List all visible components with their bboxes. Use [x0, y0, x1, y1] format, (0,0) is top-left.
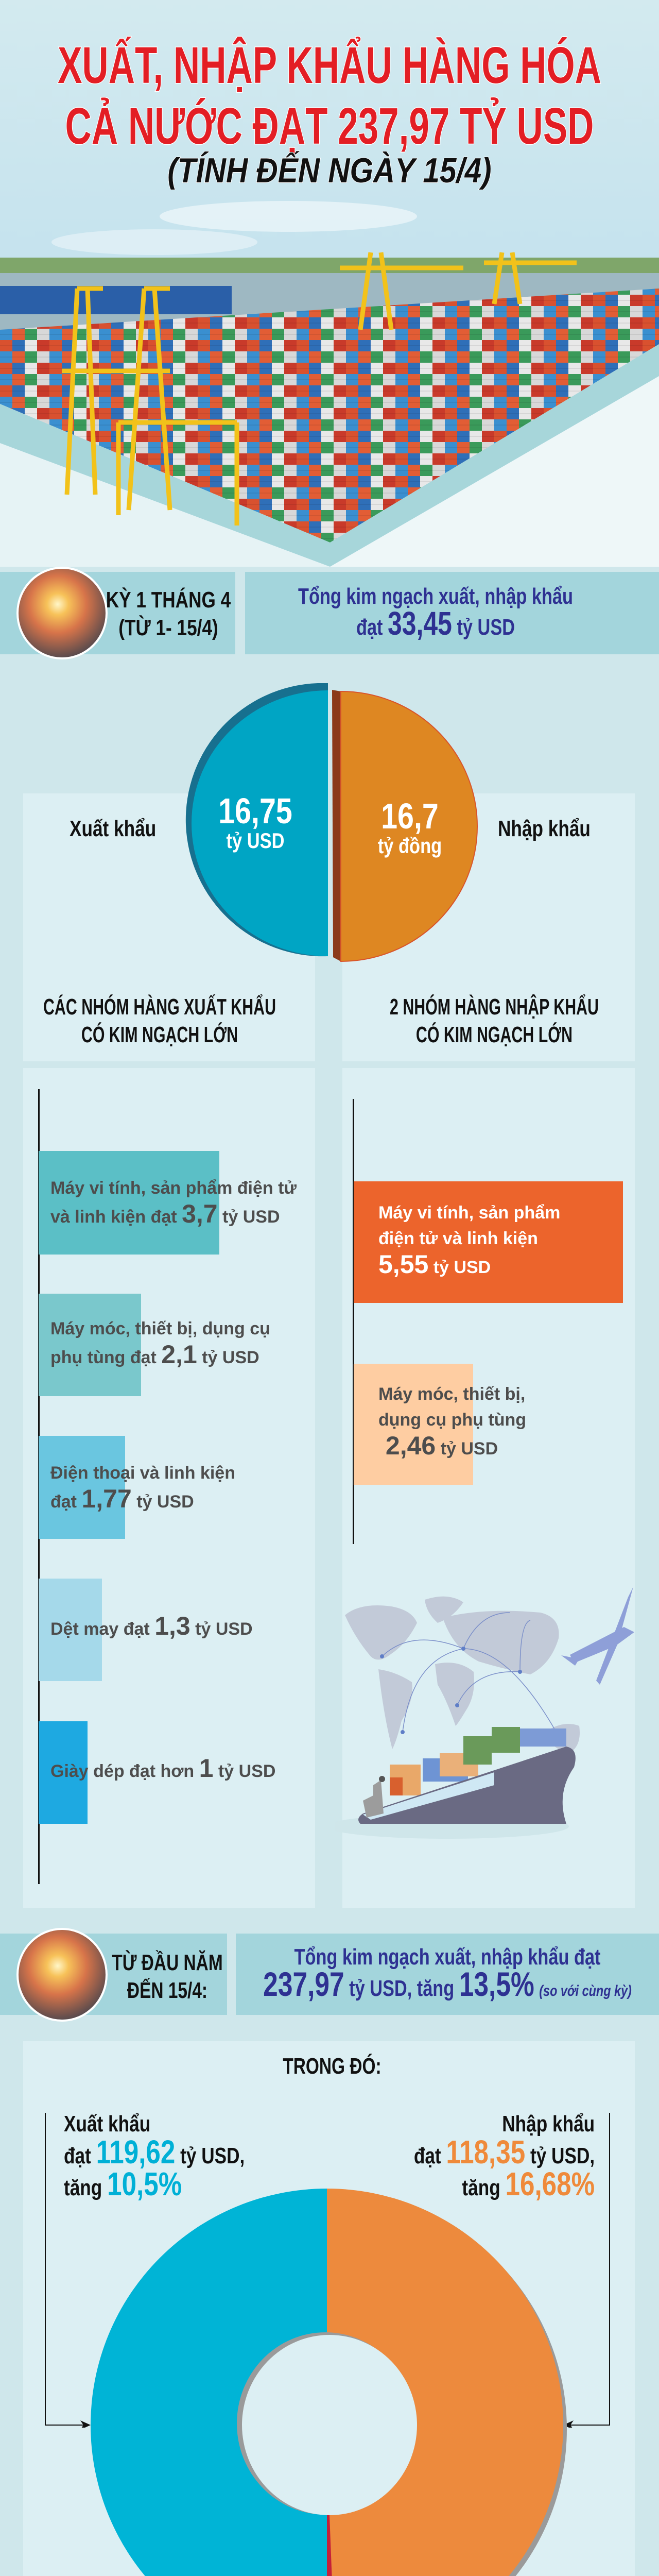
box: total: Tổng kim ngạch xuất, nhập khẩu đạt	[294, 1944, 600, 1970]
panel: export bar chart: Điện thoại và linh kiện	[50, 1463, 235, 1483]
box: period	[0, 1934, 227, 2015]
bar 3	[39, 1436, 125, 1539]
text: export year: đạt 119,62 tỷ USD,	[64, 2133, 245, 2171]
label: nhap khau: Nhập khẩu	[498, 816, 591, 841]
panel: export bar chart: đạt 1,77 tỷ USD	[50, 1484, 194, 1513]
panel: export bar chart: phụ tùng đạt 2,1 tỷ USD	[50, 1340, 259, 1369]
text: import year: đạt 118,35 tỷ USD,	[414, 2133, 595, 2171]
text: import year	[414, 2111, 595, 2202]
icon: port photo circle	[16, 567, 108, 659]
bracket arrows	[45, 2113, 610, 2428]
panel: import bar chart	[342, 1068, 635, 1908]
header band 1	[0, 567, 659, 659]
pie label: export value	[218, 791, 292, 853]
heading: import groups: CÓ KIM NGẠCH LỚN	[416, 1022, 573, 1047]
subtitle: (TÍNH ĐẾN NGÀY 15/4)	[167, 151, 492, 190]
heading: export groups	[43, 994, 276, 1047]
text: period	[112, 1950, 223, 2003]
text: period: KỲ 1 THÁNG 4	[106, 587, 231, 613]
label: xuat khau: Xuất khẩu	[70, 816, 156, 841]
panel: export bar chart: và linh kiện đạt 3,7 tỷ USD	[50, 1199, 280, 1228]
text: period: ĐẾN 15/4:	[127, 1978, 207, 2003]
box: total: đạt 33,45 tỷ USD	[356, 605, 515, 642]
heading: import groups	[390, 994, 599, 1047]
title: CẢ NƯỚC ĐẠT 237,97 TỶ USD	[65, 97, 594, 155]
box: total	[236, 1934, 659, 2015]
pie label: export value: 16,75	[218, 791, 292, 831]
text: import year: tăng 16,68%	[462, 2165, 595, 2202]
title: XUẤT, NHẬP KHẨU HÀNG HÓA	[58, 37, 601, 94]
panel: import bar chart: 2,46 tỷ USD	[386, 1431, 498, 1460]
axis	[353, 1099, 354, 1544]
heading: import groups: 2 NHÓM HÀNG NHẬP KHẨU	[390, 994, 599, 1020]
panel: right import lower	[342, 793, 635, 1061]
pie label: import value: tỷ đồng	[378, 834, 442, 858]
pie label: import value	[378, 796, 442, 858]
illustration: world map, ship and plane	[342, 1587, 634, 1839]
text: period: TỪ ĐẦU NĂM	[112, 1950, 223, 1975]
pie label: import value: 16,7	[381, 796, 439, 836]
donut chart	[91, 2189, 567, 2576]
panel: import bar chart: điện tử và linh kiện	[378, 1229, 538, 1248]
panel: left export lower	[23, 793, 315, 1061]
panel: import bar chart: dụng cụ phụ tùng	[378, 1410, 526, 1430]
heading: export groups: CÁC NHÓM HÀNG XUẤT KHẨU	[43, 994, 276, 1020]
heading: export groups: CÓ KIM NGẠCH LỚN	[81, 1022, 238, 1047]
text: export year: tăng 10,5%	[64, 2165, 182, 2202]
title	[57, 36, 601, 155]
panel: export bar chart: Giày dép đạt hơn 1 tỷ USD	[50, 1754, 275, 1783]
pie label: export value: tỷ USD	[227, 828, 284, 853]
panel: import bar chart: Máy vi tính, sản phẩm	[378, 1203, 560, 1223]
header band 2	[0, 1928, 659, 2022]
box: total	[245, 572, 659, 654]
bar 1	[354, 1181, 623, 1303]
panel: export bar chart: Dệt may đạt 1,3 tỷ USD	[50, 1612, 253, 1640]
panel: export bar chart	[23, 1068, 315, 1908]
box: period	[0, 572, 235, 654]
text: export year	[64, 2111, 245, 2202]
text: period: (TỪ 1- 15/4)	[118, 615, 218, 640]
icon: port photo circle	[16, 1928, 108, 2022]
text: period	[106, 587, 231, 640]
panel: trong do	[23, 2041, 635, 2576]
panel: export bar chart: Máy vi tính, sản phẩm điện tử	[50, 1178, 297, 1198]
bar 4	[39, 1579, 102, 1681]
axis	[38, 1089, 40, 1884]
bar 1	[39, 1151, 219, 1255]
hero background	[0, 201, 659, 567]
box: total: Tổng kim ngạch xuất, nhập khẩu	[298, 584, 573, 609]
panel: export bar chart: Máy móc, thiết bị, dụng cụ	[50, 1319, 270, 1338]
heading: trong do: TRONG ĐÓ:	[283, 2054, 381, 2079]
panel: import bar chart: Máy móc, thiết bị,	[378, 1384, 525, 1404]
bar 5	[39, 1721, 88, 1824]
bar 2	[354, 1364, 473, 1485]
pie chart: ky 1 thang 4	[185, 683, 478, 962]
panel: import bar chart: 5,55 tỷ USD	[378, 1250, 491, 1279]
text: export year: Xuất khẩu	[64, 2111, 150, 2137]
text: import year: Nhập khẩu	[502, 2111, 595, 2137]
bar 2	[39, 1294, 141, 1396]
box: total: 237,97 tỷ USD, tăng 13,5% (so với cùng kỳ)	[263, 1965, 632, 2003]
